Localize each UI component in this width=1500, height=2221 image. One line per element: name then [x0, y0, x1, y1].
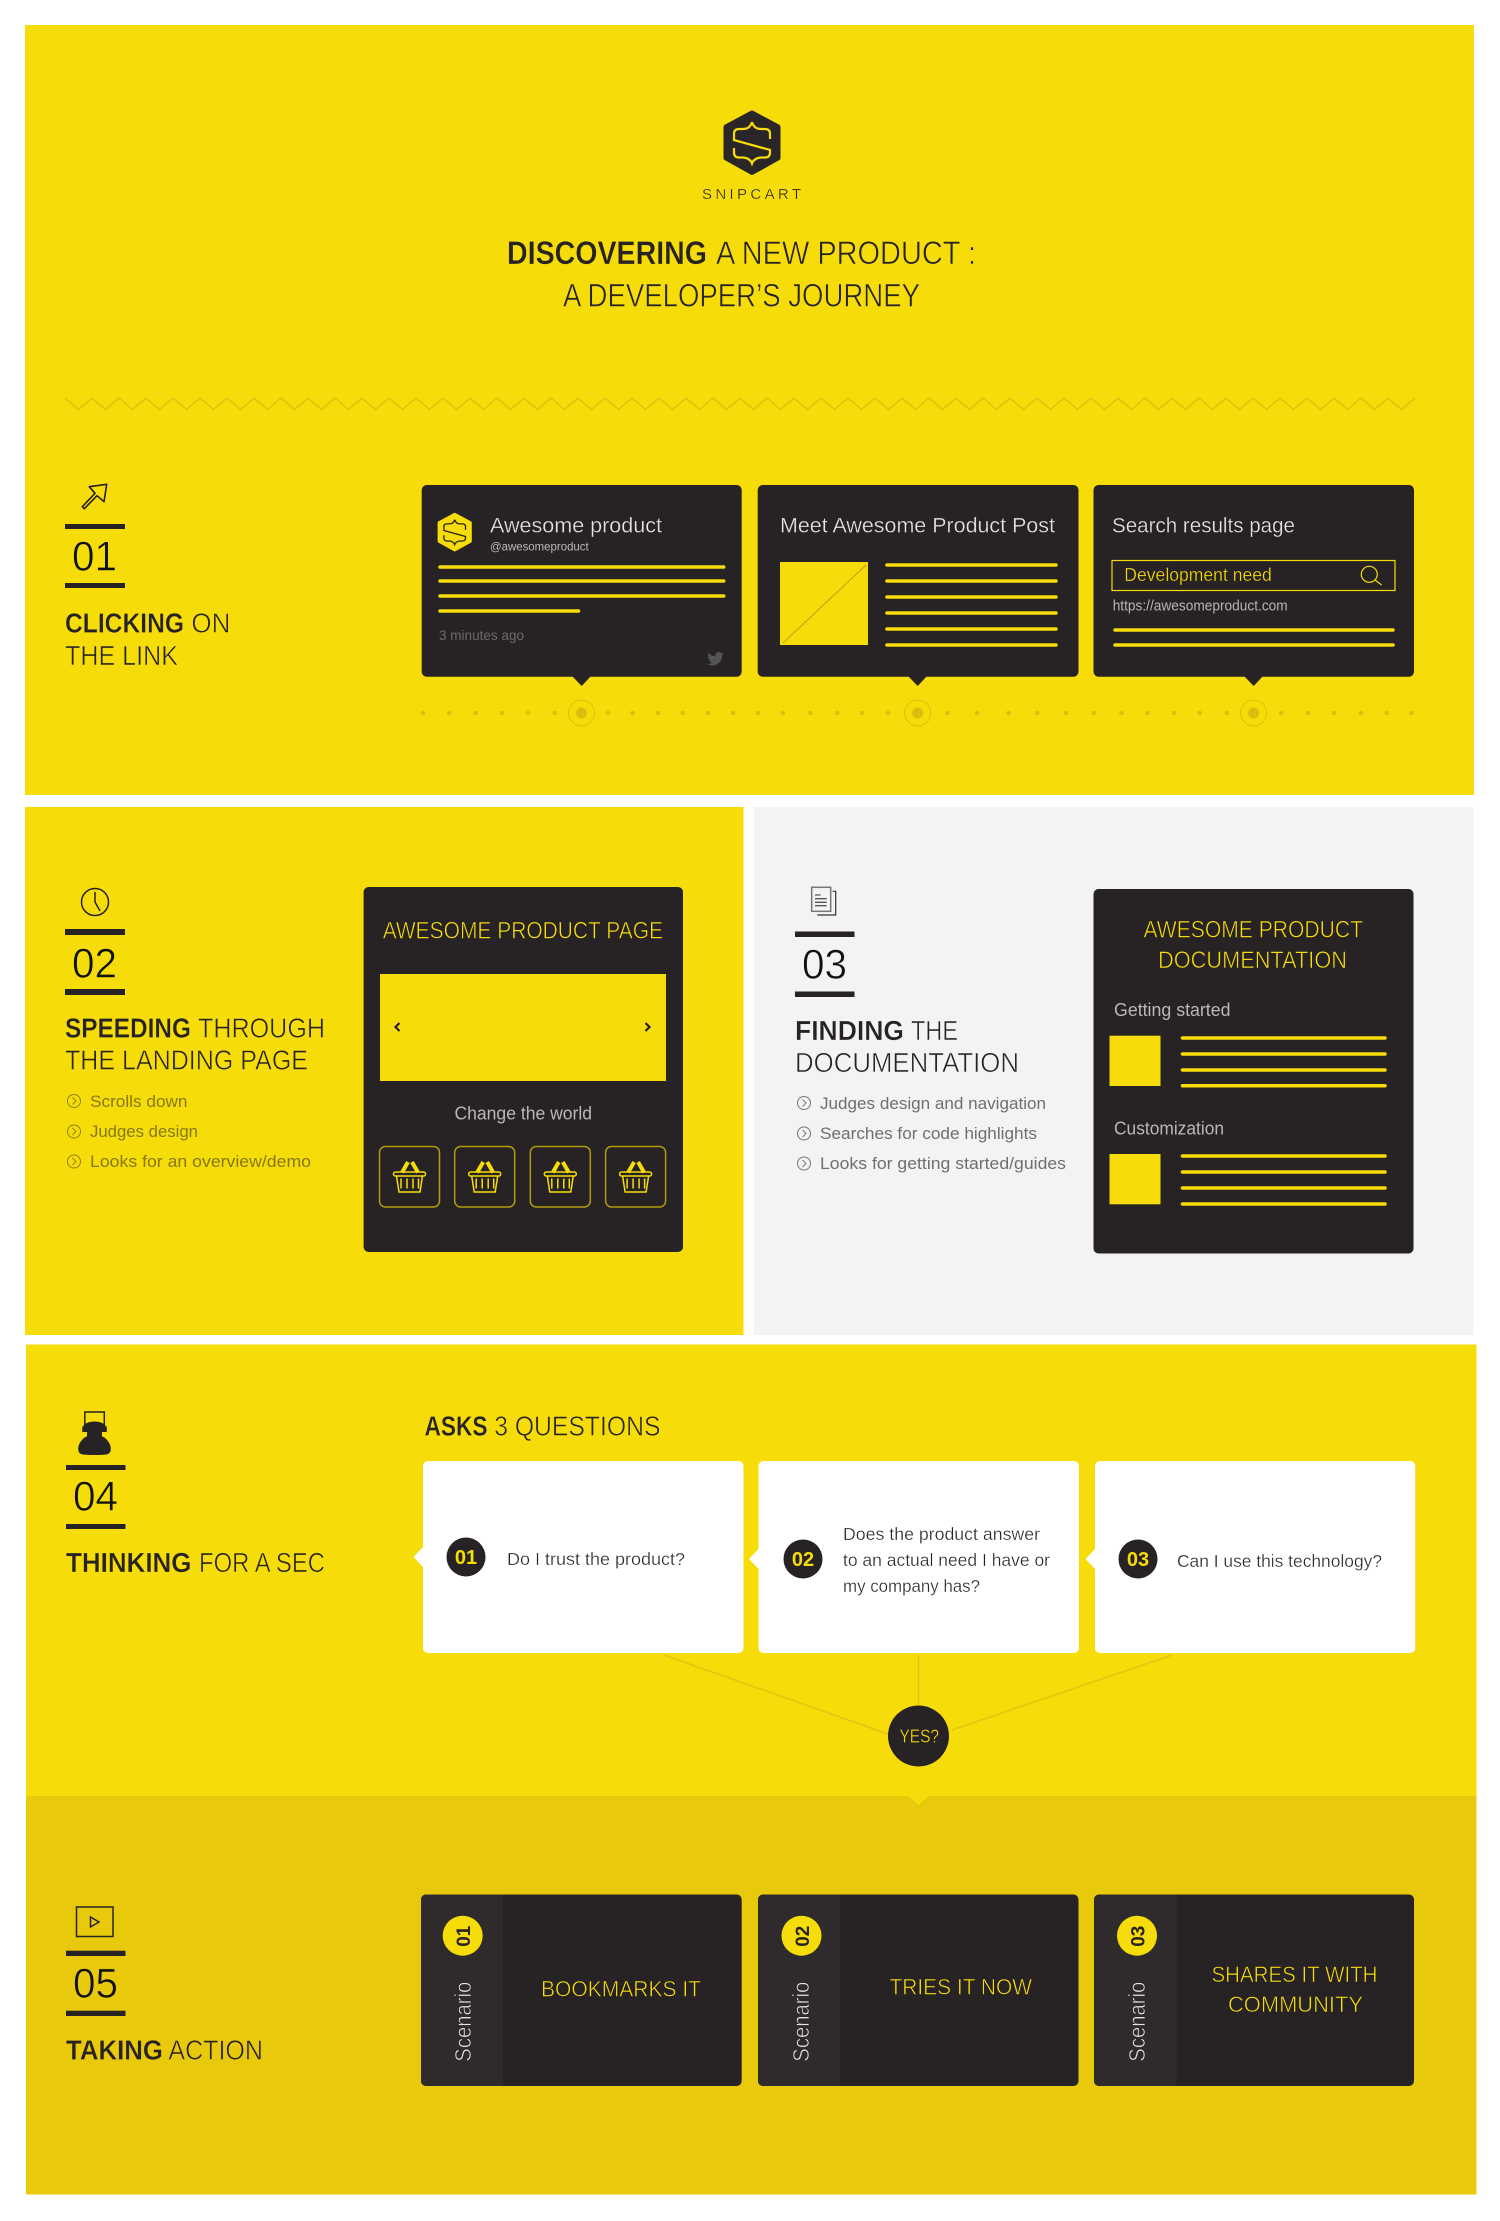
scenario card 01: BOOKMARKS IT	[541, 1976, 701, 2002]
step 02 label: THROUGH	[198, 1012, 325, 1044]
scenario card 01	[421, 1894, 742, 2086]
card: tweet: @awesomeproduct	[490, 540, 589, 554]
question card 01: Do I trust the product?	[507, 1549, 685, 1569]
step 04 label: 04	[73, 1472, 118, 1520]
card: product page mockup: Change the world	[454, 1104, 592, 1124]
step 04 label: FOR A SEC	[199, 1547, 325, 1578]
step 03 label: Looks for getting started/guides	[820, 1154, 1066, 1173]
card: product page mockup	[364, 887, 683, 1252]
decision circle: yes?	[888, 1706, 949, 1766]
step 01 label: THE LINK	[65, 640, 178, 671]
scenario card 03	[1094, 1894, 1414, 2086]
card: documentation mockup: DOCUMENTATION	[1158, 947, 1347, 974]
scenario card 03: Scenario	[1124, 1982, 1150, 2062]
panel: step 05 background	[26, 1796, 1476, 2194]
question card 02	[749, 1461, 1079, 1653]
step 03 label: Judges design and navigation	[820, 1094, 1046, 1113]
logo: Snipcart	[702, 113, 801, 203]
card: tweet	[422, 485, 742, 686]
icon: twitter bird	[707, 652, 724, 665]
bullet list	[798, 1096, 810, 1170]
question card 03: 03	[1127, 1549, 1149, 1571]
question card 01: 01	[455, 1547, 477, 1569]
question card 02: to an actual need I have or	[843, 1550, 1050, 1570]
card: search results: Development need	[1124, 565, 1272, 585]
step 02 label: 02	[72, 940, 117, 986]
step 01 label	[65, 484, 230, 671]
panel: step 02 background	[25, 807, 744, 1335]
step 03 label	[795, 887, 1066, 1173]
card: documentation mockup: Customization	[1114, 1118, 1224, 1138]
card: documentation mockup	[1094, 889, 1414, 1254]
card: search results: https://awesomeproduct.com	[1113, 599, 1288, 615]
timeline dots	[421, 700, 1414, 726]
step 04 label: THINKING	[66, 1547, 192, 1578]
step 05 label: TAKING	[66, 2034, 163, 2066]
step 05 label: 05	[73, 1960, 118, 2006]
icon: document	[812, 887, 836, 915]
connector lines to yes	[664, 1655, 1172, 1734]
step 03 label: FINDING	[795, 1015, 904, 1046]
card: tweet: Awesome product	[490, 514, 662, 538]
arrow: down to step 05	[908, 1796, 928, 1805]
step 02 label: Looks for an overview/demo	[90, 1152, 311, 1171]
step 02 label: THE LANDING PAGE	[65, 1044, 308, 1076]
heading: asks 3 questions: 3 QUESTIONS	[494, 1410, 660, 1442]
decision circle: yes?: YES?	[900, 1726, 939, 1746]
title	[507, 235, 976, 314]
step 03 label: THE	[911, 1015, 958, 1046]
card: product page mockup: AWESOME PRODUCT PAGE	[383, 918, 663, 944]
panel: header and step 01 background	[25, 25, 1474, 795]
card: documentation mockup: AWESOME PRODUCT	[1144, 916, 1363, 944]
step 02 label: Judges design	[90, 1122, 198, 1141]
step 02 label: Scrolls down	[90, 1092, 188, 1111]
icon: clock	[82, 888, 108, 916]
icon: cursor arrow	[82, 484, 107, 509]
heading: asks 3 questions	[424, 1410, 660, 1442]
step 02 label	[65, 888, 325, 1171]
card: search results	[1094, 485, 1414, 686]
card: search results: Search results page	[1112, 514, 1295, 538]
scenario card 02	[758, 1894, 1078, 2086]
panel: step 03 background	[754, 807, 1474, 1335]
panel: step 04 background	[26, 1344, 1476, 1796]
step 01 label: 01	[72, 532, 117, 580]
scenario card 03: COMMUNITY	[1228, 1992, 1363, 2017]
scenario card 02: 02	[793, 1926, 814, 1947]
question card 03	[1086, 1461, 1415, 1653]
bullet list	[68, 1094, 80, 1168]
scenario card 03: SHARES IT WITH	[1212, 1962, 1378, 1987]
icon: basket buttons	[380, 1146, 666, 1207]
step 05 label	[66, 1907, 263, 2066]
logo: Snipcart: SNIPCART	[702, 186, 801, 203]
question card 02: Does the product answer	[843, 1524, 1040, 1544]
question card 01	[414, 1461, 744, 1653]
step 01 label: CLICKING	[65, 608, 184, 638]
scenario card 01: Scenario	[450, 1982, 476, 2062]
step 04 label	[66, 1412, 325, 1578]
step 03 label: Searches for code highlights	[820, 1124, 1037, 1143]
heading: asks 3 questions: ASKS	[424, 1410, 488, 1442]
icon: magnifier	[1375, 580, 1382, 585]
title: A NEW PRODUCT :	[716, 235, 976, 271]
card: product post	[758, 485, 1078, 686]
card: tweet: 3 minutes ago	[439, 627, 524, 643]
scenario card 03: 03	[1128, 1926, 1149, 1947]
scenario card 01: 01	[454, 1925, 475, 1947]
title: DISCOVERING	[507, 235, 707, 271]
question card 03: Can I use this technology?	[1177, 1551, 1382, 1571]
title: A DEVELOPER’S JOURNEY	[563, 278, 920, 314]
step 03 label: 03	[802, 940, 847, 988]
question card 02: my company has?	[843, 1576, 980, 1596]
step 02 label: SPEEDING	[65, 1012, 191, 1044]
icon: small Snipcart logo	[439, 514, 470, 550]
step 01 label: ON	[191, 608, 230, 638]
card: documentation mockup: Getting started	[1114, 1000, 1230, 1020]
scenario card 02: TRIES IT NOW	[890, 1974, 1033, 2000]
scenario card 02: Scenario	[788, 1982, 814, 2062]
card: product post: Meet Awesome Product Post	[780, 514, 1055, 538]
step 03 label: DOCUMENTATION	[795, 1047, 1019, 1078]
step 05 label: ACTION	[168, 2034, 263, 2066]
icon: person with lantern	[78, 1412, 111, 1455]
icon: play screen	[76, 1907, 113, 1936]
question card 02: 02	[792, 1549, 814, 1571]
